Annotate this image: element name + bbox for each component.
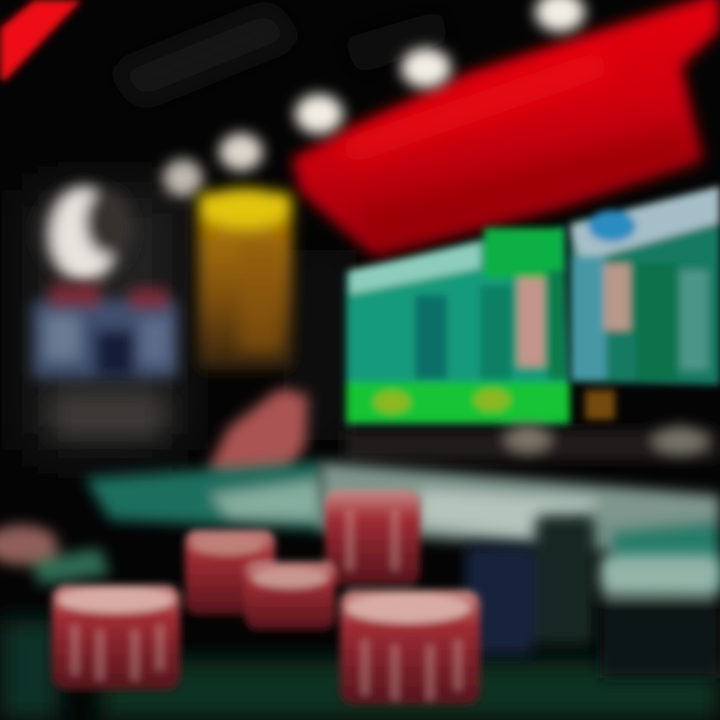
dark chip stacks — [465, 515, 595, 655]
pink chair — [208, 388, 308, 485]
pale table — [320, 462, 720, 590]
red chip stacks — [52, 490, 480, 705]
top-left red streak — [0, 0, 82, 80]
left edge chips — [0, 525, 110, 585]
green screen — [346, 226, 570, 425]
moon sign — [35, 182, 135, 282]
counter lights — [345, 424, 720, 460]
grey plaque — [52, 394, 164, 436]
right table edge — [600, 555, 720, 678]
floor — [0, 620, 720, 720]
yellow panel — [198, 188, 292, 370]
banner shading folds — [340, 50, 700, 250]
right screen — [570, 186, 720, 420]
ceiling lights — [163, 0, 585, 197]
ceiling panels — [110, 5, 450, 105]
left wall haze — [30, 190, 340, 450]
blue-grey sign — [32, 284, 178, 378]
teal table — [85, 462, 330, 530]
red banner — [292, 0, 720, 256]
